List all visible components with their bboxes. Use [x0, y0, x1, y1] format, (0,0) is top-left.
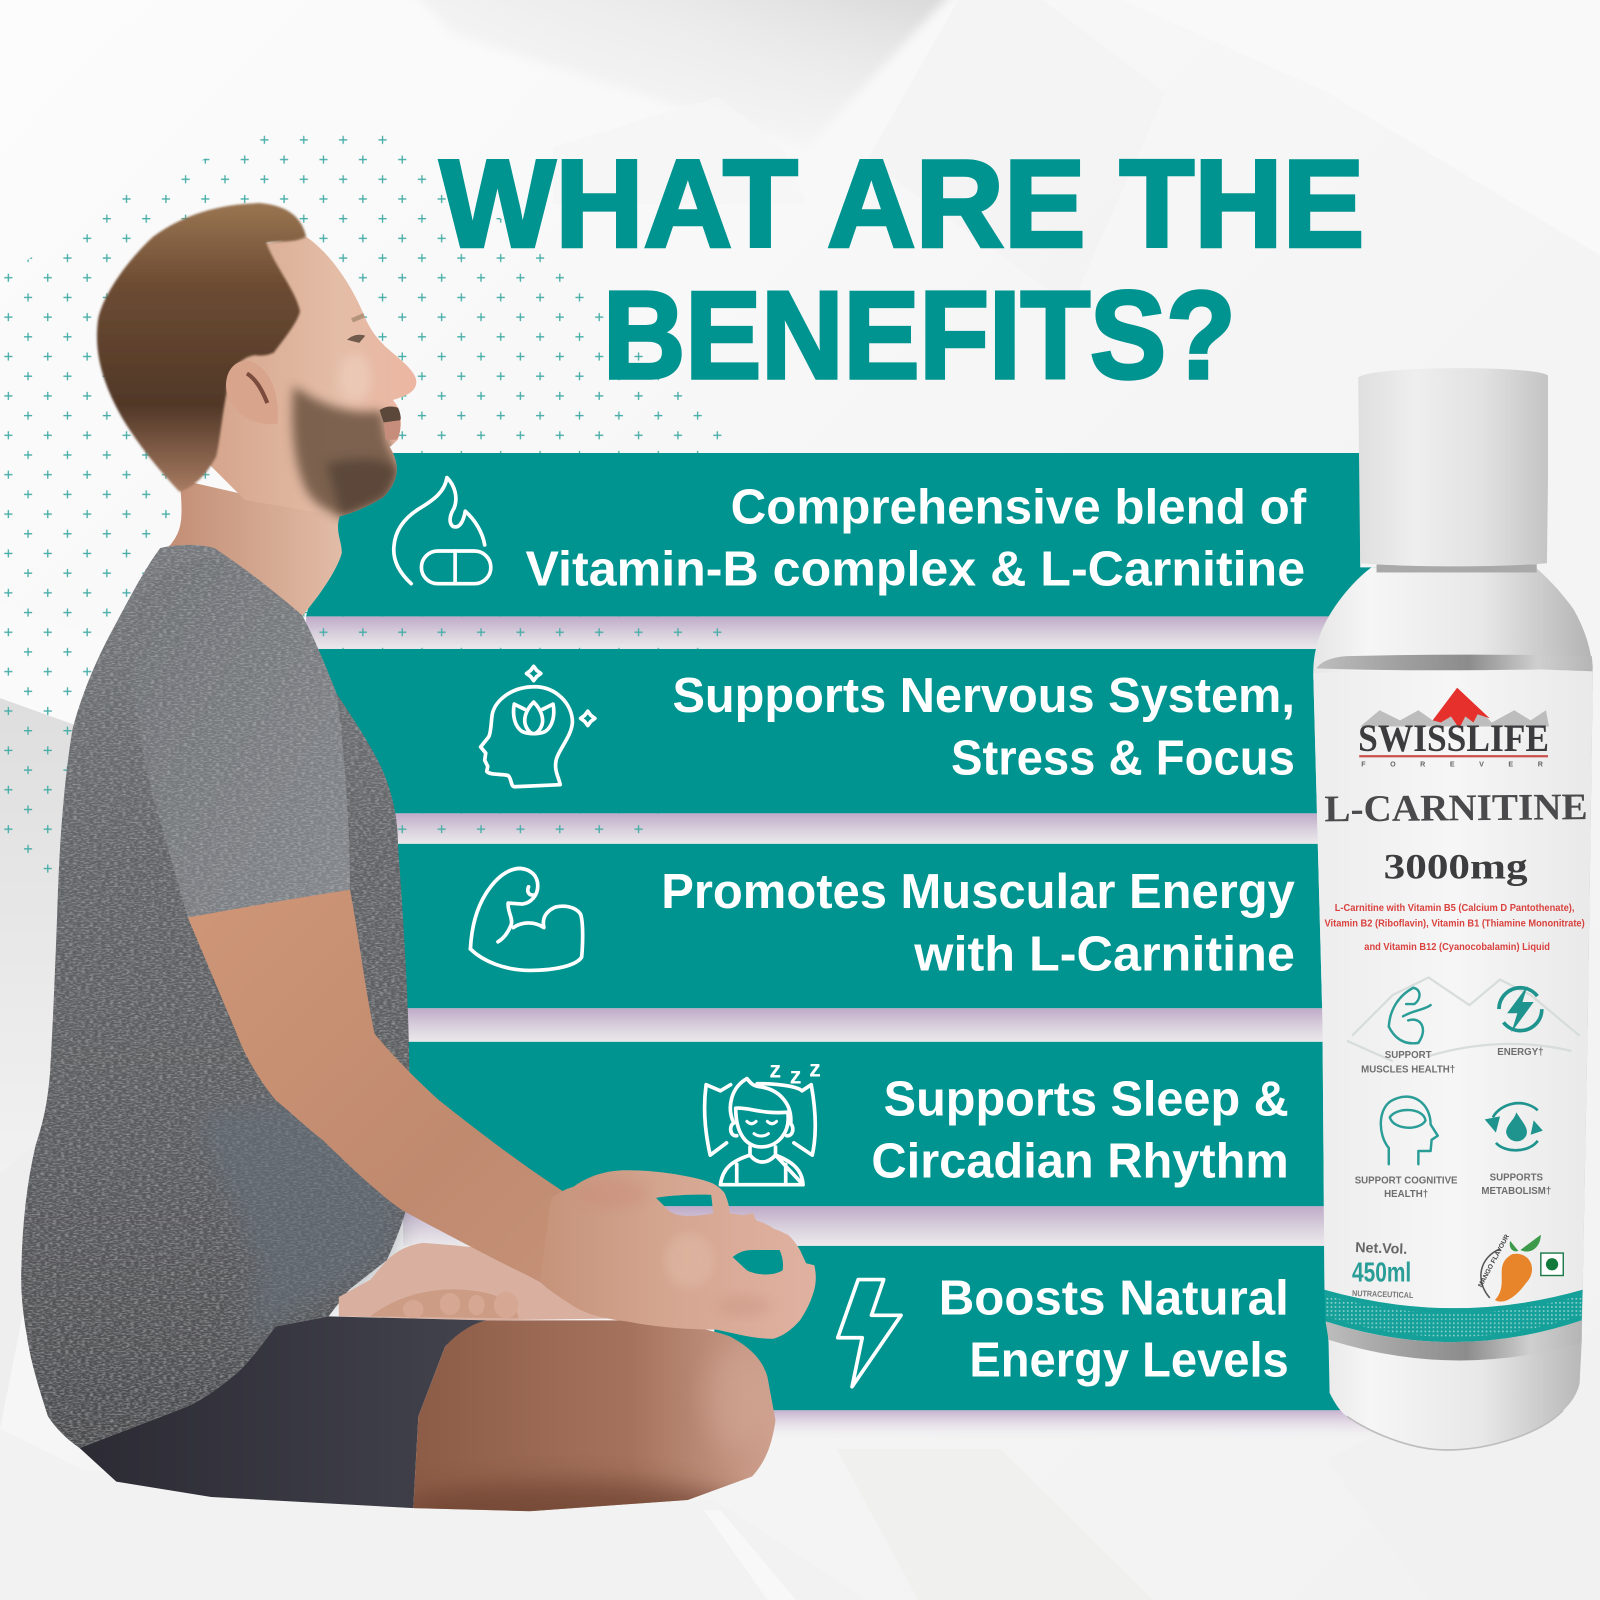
- hair: [97, 203, 306, 492]
- label captions: METABOLISM†: [1481, 1186, 1551, 1197]
- red description: [1324, 903, 1585, 953]
- text: sleep: [871, 1072, 1289, 1189]
- dosage: 3000mg: [1384, 847, 1528, 887]
- icon: zzz: z: [769, 1057, 781, 1083]
- net volume: Net.Vol.: [1355, 1240, 1408, 1258]
- label captions: MUSCLES HEALTH†: [1361, 1064, 1455, 1075]
- text: sleep: Supports Sleep &: [884, 1072, 1289, 1126]
- text: nervous system: Supports Nervous System,: [672, 669, 1295, 723]
- banner 1: blend: [306, 453, 1378, 616]
- banner 5: natural energy: [714, 1246, 1347, 1410]
- banner 2: nervous system: [306, 649, 1347, 813]
- title: BENEFITS?: [603, 266, 1236, 405]
- label captions: SUPPORT COGNITIVE: [1355, 1176, 1458, 1187]
- title: [440, 134, 1364, 405]
- icon: zzz: z: [809, 1056, 821, 1082]
- bottle base shadow edge: [1347, 1410, 1563, 1450]
- title: WHAT ARE THE: [440, 134, 1364, 273]
- neck shadow: [1377, 564, 1537, 572]
- mountain watermark: [1347, 978, 1580, 1061]
- feet: [339, 1243, 622, 1320]
- arm: [188, 890, 633, 1322]
- text: muscular energy: Promotes Muscular Energy: [661, 865, 1295, 919]
- icon: lightning bolt: [838, 1280, 901, 1387]
- net volume: 450ml: [1352, 1257, 1411, 1288]
- toes: [403, 1292, 518, 1318]
- label captions: SUPPORTS: [1490, 1173, 1544, 1184]
- neck: [153, 480, 342, 616]
- teal band: [1324, 1290, 1583, 1342]
- mango flavour badge: MANGO FLAVOUR: [1477, 1233, 1511, 1289]
- label captions: [1355, 1047, 1551, 1200]
- icon: flame and capsule: [394, 478, 491, 584]
- net volume: NUTRACEUTICAL: [1352, 1289, 1413, 1300]
- bottle body: [1313, 567, 1593, 1450]
- red description: L-Carnitine with Vitamin B5 (Calcium D Pantothenate),: [1335, 903, 1575, 914]
- icon: head with lotus: [481, 666, 595, 787]
- facial shading and beard: [292, 312, 403, 518]
- man meditating in profile: [21, 203, 816, 1539]
- icon: zzz: z: [790, 1063, 802, 1089]
- text: nervous system: Stress & Focus: [951, 731, 1295, 785]
- text: natural energy: [939, 1271, 1289, 1388]
- hand with gaps between fingers: [540, 1170, 816, 1339]
- text: blend: [526, 480, 1307, 597]
- shorts: [80, 1316, 487, 1508]
- text: natural energy: Energy Levels: [969, 1334, 1289, 1388]
- label icons: [1381, 986, 1543, 1164]
- banner 3: muscular energy: [393, 844, 1347, 1008]
- icon: flexed arm: [470, 868, 583, 970]
- logo: [1358, 688, 1549, 768]
- bottle cap: [1358, 368, 1548, 566]
- text: natural energy: Boosts Natural: [939, 1271, 1289, 1325]
- text: nervous system: [672, 669, 1295, 785]
- dotted plus pattern: [0, 133, 727, 880]
- shirt torso: [21, 545, 409, 1448]
- net volume: [1352, 1240, 1413, 1300]
- silver band bottom: [1326, 1320, 1582, 1360]
- shirt lower blue tone: [194, 1092, 405, 1357]
- thigh: [413, 1320, 776, 1512]
- shirt sleeve: [131, 556, 350, 917]
- gradient strips below banners: [306, 616, 1429, 1441]
- text: sleep: Circadian Rhythm: [871, 1135, 1289, 1189]
- silver band top: [1316, 655, 1593, 670]
- label captions: HEALTH†: [1384, 1189, 1428, 1200]
- red description: and Vitamin B12 (Cyanocobalamin) Liquid: [1364, 942, 1550, 953]
- text: blend: Comprehensive blend of: [731, 480, 1307, 534]
- product name: L-CARNITINE: [1324, 786, 1588, 830]
- product bottle: [1313, 368, 1593, 1450]
- icon: sleeping person on pillow: [705, 1079, 815, 1185]
- logo: FOREVER: [1361, 760, 1543, 768]
- red description: Vitamin B2 (Riboflavin), Vitamin B1 (Thiamine Mononitrate): [1324, 919, 1585, 930]
- face: [153, 237, 416, 516]
- label panel: [1313, 669, 1593, 1308]
- label captions: SUPPORT: [1385, 1050, 1432, 1061]
- icon: zzz: [769, 1056, 821, 1089]
- banner 4: sleep: [403, 1042, 1347, 1206]
- label captions: ENERGY†: [1497, 1047, 1544, 1058]
- text: muscular energy: with L-Carnitine: [913, 927, 1295, 981]
- text: blend: Vitamin-B complex & L-Carnitine: [526, 543, 1305, 597]
- mango flavour badge: [1477, 1233, 1563, 1302]
- logo: SWISSLIFE: [1358, 717, 1549, 760]
- text: muscular energy: [661, 865, 1295, 981]
- ear: [226, 361, 278, 424]
